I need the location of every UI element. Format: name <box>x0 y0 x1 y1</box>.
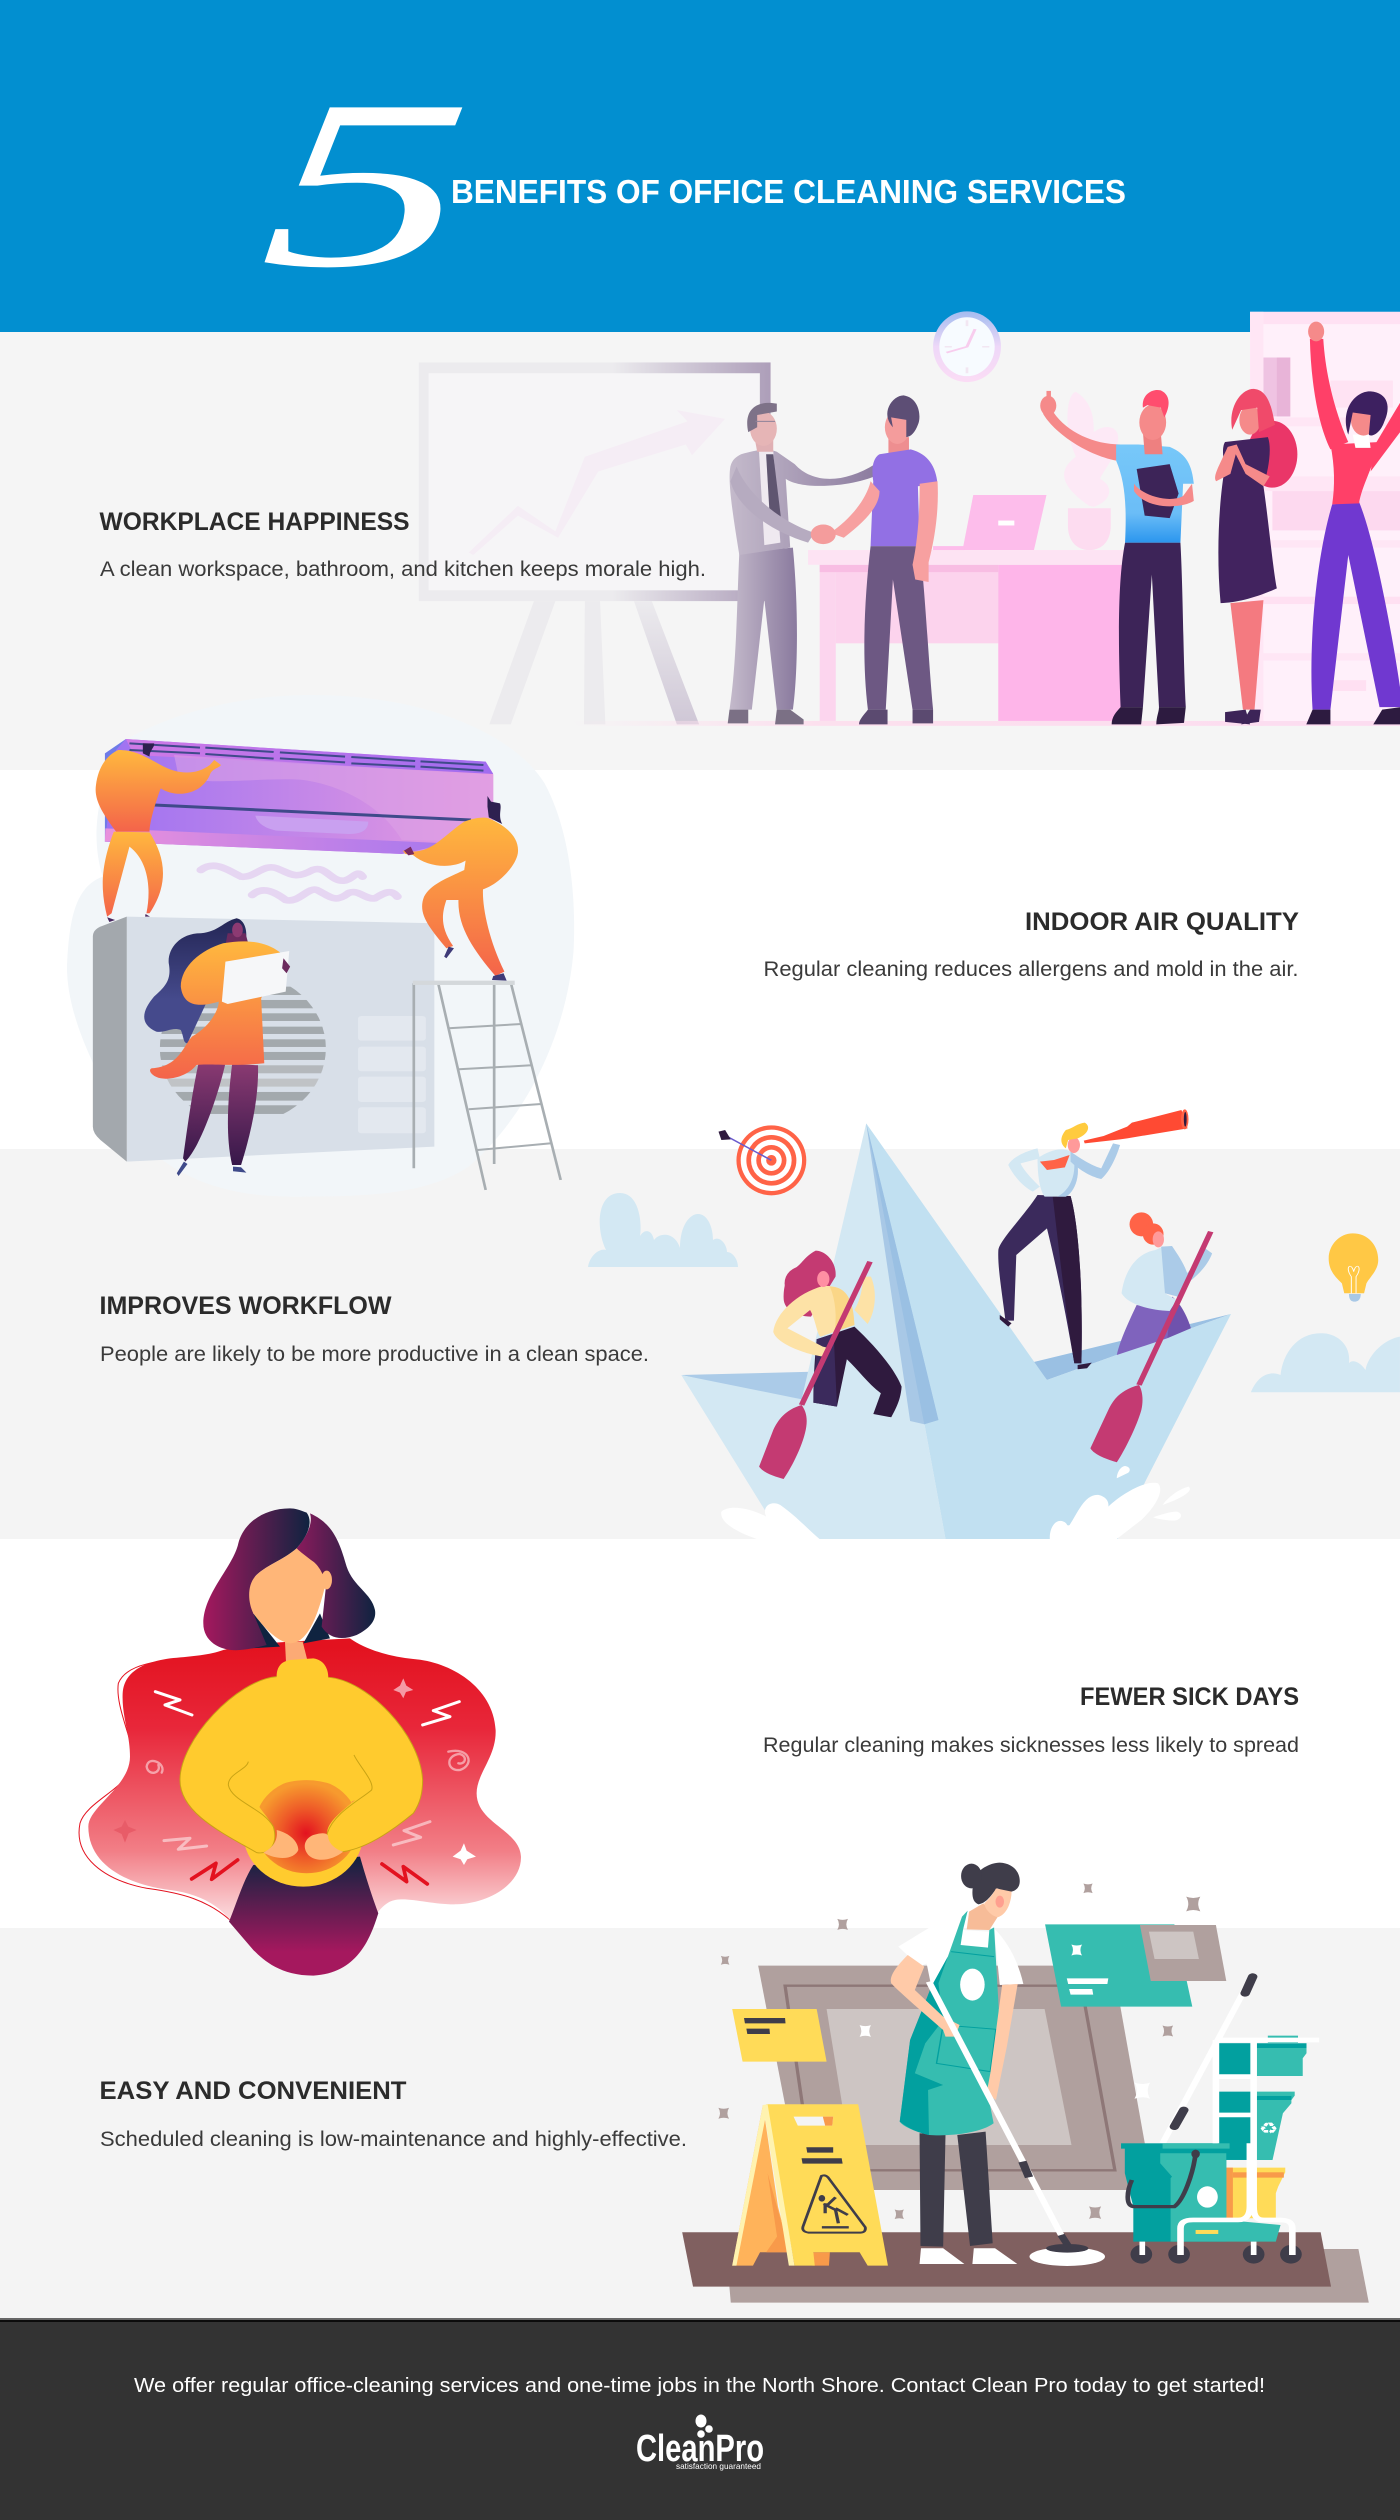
sweater body under arms <box>235 1747 373 1813</box>
logo: CleanPro: CleanPro <box>636 2428 764 2470</box>
dress <box>229 1857 378 1976</box>
panel text: workplace happiness <box>100 508 706 581</box>
title number five: 5 <box>252 51 480 317</box>
panel text: easy and convenient <box>100 2077 687 2151</box>
description: Scheduled cleaning is low-maintenance and highly-effective. <box>100 2127 687 2151</box>
mop <box>929 1982 1105 2266</box>
left cloud <box>588 1193 738 1267</box>
figure: man with telescope <box>998 1109 1189 1369</box>
figure: woman rowing left <box>759 1251 902 1479</box>
logo: CleanPro <box>636 2414 764 2471</box>
second mop pole <box>1163 1977 1253 2143</box>
call to action text: We offer regular office-cleaning services and one-time jobs in the North Shore. Contact Clean Pro today to get started! <box>134 2374 1265 2397</box>
water splashes <box>721 1466 1190 1539</box>
wet floor caution sign <box>732 2104 888 2266</box>
red pain blob <box>79 1638 521 1920</box>
paper boat <box>681 1123 1231 1539</box>
icon: target with arrow <box>719 1125 806 1195</box>
ladder <box>413 981 561 1190</box>
figure: man with clipboard, thumbs up <box>1040 390 1194 724</box>
illustration: woman with stomach ache <box>79 1508 521 1976</box>
illustration: paper boat team <box>681 1109 1400 1539</box>
pain marks <box>147 1692 469 1884</box>
aching belly <box>243 1779 363 1887</box>
sparkles <box>718 1884 1200 2219</box>
pain stars <box>113 1678 476 1865</box>
yellow note card <box>732 2009 827 2062</box>
panel: footer <box>134 2374 1265 2471</box>
description: A clean workspace, bathroom, and kitchen keeps morale high. <box>100 557 706 581</box>
panel text: fewer sick days <box>763 1683 1299 1757</box>
figure: businessman in suit <box>728 403 880 724</box>
panel text: improves workflow <box>100 1292 649 1366</box>
hair <box>203 1508 375 1650</box>
wavy air lines <box>201 866 397 900</box>
icon: wall clock <box>933 311 1001 382</box>
heading: INDOOR AIR QUALITY <box>1025 908 1299 936</box>
figure: woman rowing right <box>1090 1212 1212 1462</box>
illustration: air conditioner repair team <box>67 739 574 1190</box>
background frame <box>758 1966 1153 2190</box>
outdoor unit with fan <box>93 917 434 1162</box>
heading: IMPROVES WORKFLOW <box>100 1292 392 1320</box>
hands <box>263 1830 343 1860</box>
teal and grey cards <box>1045 1924 1226 2007</box>
sweater with arms <box>180 1658 423 1853</box>
description: Regular cleaning reduces allergens and mold in the air. <box>764 957 1298 981</box>
floor <box>682 2232 1369 2303</box>
figure: woman in dark dress <box>1215 389 1297 724</box>
figure: woman cheering with raised arms <box>1306 322 1400 724</box>
panel: header <box>252 51 1126 317</box>
cleaning cart <box>1121 2036 1319 2264</box>
description: Regular cleaning makes sicknesses less likely to spread <box>763 1733 1299 1757</box>
illustration: cleaner mopping <box>682 1863 1369 2303</box>
figure: woman with tablet <box>144 918 290 1176</box>
logo: CleanPro: satisfaction guaranteed <box>676 2461 761 2471</box>
heading: EASY AND CONVENIENT <box>100 2077 406 2105</box>
description: People are likely to be more productive in a clean space. <box>100 1342 649 1366</box>
icon: recycling symbol: ♻ <box>1259 2120 1278 2137</box>
panel text: indoor air quality <box>764 908 1299 981</box>
face <box>249 1548 332 1662</box>
figure: man lifting unit left <box>96 743 221 922</box>
desk with laptop and plant <box>808 392 1130 721</box>
illustration: office handshake and cheering team <box>419 311 1400 726</box>
air conditioner indoor unit <box>105 739 493 854</box>
heading: FEWER SICK DAYS <box>1080 1683 1299 1711</box>
title: BENEFITS OF OFFICE CLEANING SERVICES <box>451 173 1126 210</box>
figure: cleaner in teal apron <box>891 1863 1023 2264</box>
icon: light bulb <box>1329 1233 1378 1302</box>
heading: WORKPLACE HAPPINESS <box>100 508 410 536</box>
right cloud <box>1251 1333 1400 1392</box>
figure: man in purple shirt <box>811 395 938 724</box>
whiteboard with growth arrow <box>419 362 771 724</box>
figure: man on ladder <box>403 796 518 981</box>
